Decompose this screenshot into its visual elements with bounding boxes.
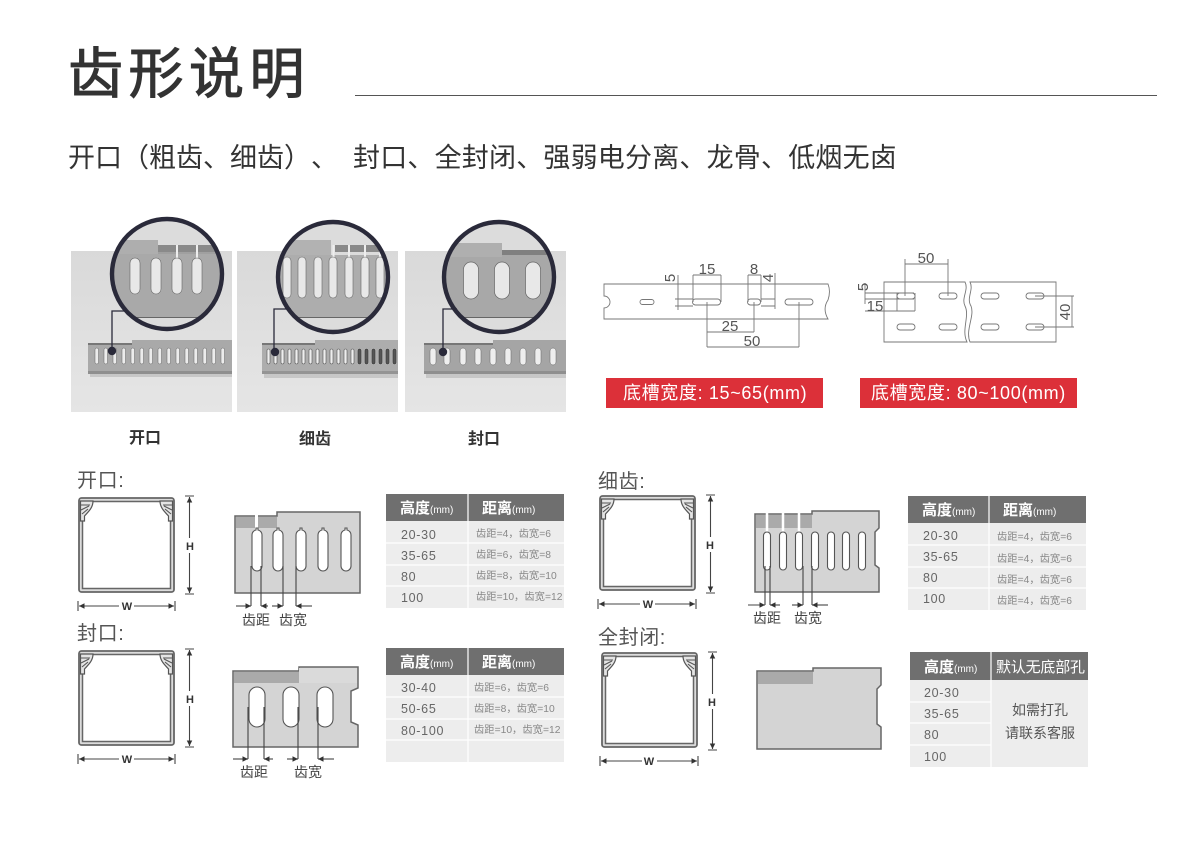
red label: 80-100: 底槽宽度: 80~100(mm) xyxy=(871,383,1066,403)
diagram: base slots 15-65: 50 xyxy=(744,333,760,350)
spec table: 20-30 xyxy=(924,686,959,700)
red label: 15-65: 底槽宽度: 15~65(mm) xyxy=(623,383,807,403)
section: fully closed xyxy=(598,626,1088,768)
tooth detail xyxy=(748,511,879,626)
subtitle xyxy=(68,143,897,173)
heading: 开口: xyxy=(77,470,124,492)
cross-section xyxy=(600,652,717,768)
cross-section: W xyxy=(122,601,133,613)
spec table xyxy=(910,652,1088,767)
spec table: 35-65 xyxy=(401,549,436,563)
cross-section: H xyxy=(186,694,194,706)
spec table: 如需打孔 xyxy=(1012,702,1068,718)
diagram: base slots 15-65 xyxy=(604,261,830,350)
red label: 15-65 xyxy=(606,378,823,408)
spec table: 齿距=6，齿宽=8 xyxy=(476,548,551,561)
spec table: 35-65 xyxy=(924,707,959,721)
cross-section: H xyxy=(708,697,716,709)
tooth detail xyxy=(233,667,358,780)
photo panel: fine tooth xyxy=(237,222,398,412)
diagram: base slots 15-65: 8 xyxy=(750,261,758,278)
photo panel: closed xyxy=(405,222,566,412)
section: fine tooth xyxy=(598,470,1086,626)
diagram: base slots 80-100: 5 xyxy=(855,283,872,291)
red label: 80-100 xyxy=(860,378,1077,408)
spec table: 齿距=4，齿宽=6 xyxy=(997,552,1072,565)
tooth detail: 齿宽 xyxy=(794,610,822,626)
cross-section xyxy=(598,495,715,611)
spec table: 35-65 xyxy=(923,550,958,564)
spec table: 请联系客服 xyxy=(1005,725,1075,741)
spec table: 100 xyxy=(401,591,424,605)
spec table: 齿距=10，齿宽=12 xyxy=(476,590,563,603)
spec table: 高度(mm) xyxy=(400,499,453,517)
spec table: 80 xyxy=(924,728,939,742)
spec table: 100 xyxy=(924,750,947,764)
spec table: 50-65 xyxy=(401,702,436,716)
spec table: 100 xyxy=(923,592,946,606)
spec table: 20-30 xyxy=(401,528,436,542)
diagram: base slots 80-100: 50 xyxy=(918,250,934,267)
heading: 封口: xyxy=(77,622,124,645)
spec table: 高度(mm) xyxy=(922,501,975,519)
cross-section: W xyxy=(644,756,655,768)
body detail xyxy=(757,668,881,749)
cross-section: W xyxy=(643,599,654,611)
tooth detail: 齿宽 xyxy=(294,764,322,780)
photo panel: open tooth xyxy=(71,219,232,412)
cross-section xyxy=(78,649,194,766)
tooth detail: 齿距 xyxy=(242,612,270,628)
cross-section: W xyxy=(122,754,133,766)
tooth detail xyxy=(235,512,360,628)
diagram: base slots 80-100 xyxy=(855,250,1074,342)
spec table: 齿距=8，齿宽=10 xyxy=(476,569,557,582)
section: open tooth xyxy=(77,470,564,628)
spec table: 80-100 xyxy=(401,724,444,738)
spec table: 齿距=4，齿宽=6 xyxy=(476,527,551,540)
photo caption: closed: 封口 xyxy=(468,430,500,448)
spec table xyxy=(908,496,1086,610)
tooth detail: 齿距 xyxy=(240,764,268,780)
diagram: base slots 15-65: 5 xyxy=(662,274,679,282)
cross-section xyxy=(78,496,194,613)
diagram: base slots 15-65: 15 xyxy=(699,261,715,278)
spec table: 齿距=8，齿宽=10 xyxy=(474,702,555,715)
section: closed xyxy=(77,622,564,780)
tooth detail: 齿宽 xyxy=(279,612,307,628)
cross-section: H xyxy=(706,540,714,552)
cross-section: H xyxy=(186,541,194,553)
subtitle: 、 xyxy=(311,143,338,173)
callout pointer xyxy=(271,309,291,356)
spec table: 齿距=4，齿宽=6 xyxy=(997,594,1072,607)
title: 齿形说明 xyxy=(68,43,310,105)
photo caption: open: 开口 xyxy=(129,430,161,447)
spec table: 距离(mm) xyxy=(1003,501,1056,519)
spec table: 默认无底部孔 xyxy=(996,659,1085,676)
spec table: 齿距=10，齿宽=12 xyxy=(474,723,561,736)
magnifier: open tooth xyxy=(110,219,225,329)
spec table: 距离(mm) xyxy=(482,499,535,517)
title rule xyxy=(355,94,1157,96)
spec table: 高度(mm) xyxy=(400,653,453,671)
diagram: base slots 15-65: 4 xyxy=(760,274,777,282)
heading: 细齿: xyxy=(598,470,645,493)
diagram: base slots 80-100: 40 xyxy=(1057,304,1074,320)
spec table xyxy=(386,494,564,608)
diagram: base slots 80-100: 15 xyxy=(867,298,883,315)
spec table: 齿距=6，齿宽=6 xyxy=(474,681,549,694)
spec table xyxy=(386,648,564,762)
callout pointer xyxy=(108,311,125,355)
photo caption: fine: 细齿 xyxy=(299,430,331,448)
spec table: 距离(mm) xyxy=(482,653,535,671)
subtitle: 开口（粗齿、细齿） xyxy=(68,143,311,173)
spec table: 20-30 xyxy=(923,529,958,543)
magnifier: closed xyxy=(442,222,557,332)
spec table: 齿距=4，齿宽=6 xyxy=(997,573,1072,586)
spec table: 30-40 xyxy=(401,681,436,695)
callout pointer xyxy=(439,309,457,356)
tooth detail: 齿距 xyxy=(753,610,781,626)
heading: 全封闭: xyxy=(598,626,666,649)
magnifier: fine tooth xyxy=(276,222,391,332)
spec table: 80 xyxy=(923,571,938,585)
spec table: 齿距=4，齿宽=6 xyxy=(997,530,1072,543)
spec table: 80 xyxy=(401,570,416,584)
subtitle: 封口、全封闭、强弱电分离、龙骨、低烟无卤 xyxy=(353,143,897,173)
spec table: 高度(mm) xyxy=(924,658,977,676)
diagram: base slots 15-65: 25 xyxy=(722,318,738,335)
